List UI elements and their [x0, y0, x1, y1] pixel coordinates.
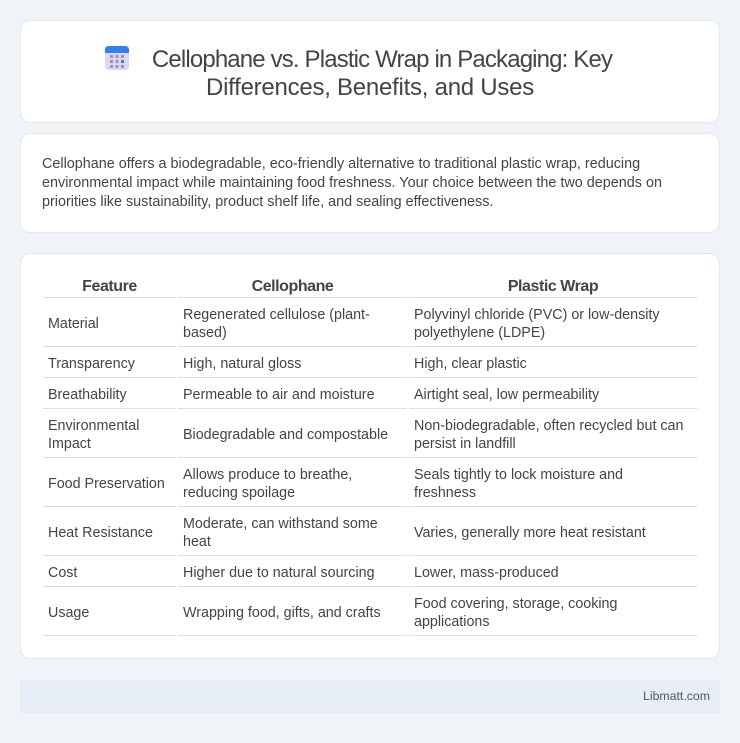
row: Food Preservation: Food Preservation: [48, 476, 165, 492]
intro text: Cellophane offers a biodegradable, eco-friendly alternative to traditional plastic wrap, reducing: [42, 156, 640, 172]
row: Material: Material: [48, 316, 99, 332]
title line 2: Differences, Benefits, and Uses: [206, 74, 534, 101]
footer credit: Libmatt.com: [643, 689, 710, 703]
Material cellophane: [183, 307, 370, 341]
Material cellophane: based): [183, 325, 227, 341]
Food Preservation cellophane: Allows produce to breathe,: [183, 467, 352, 483]
Food Preservation plastic wrap: [414, 467, 623, 501]
Environmental Impact plastic wrap: [414, 418, 683, 452]
Environmental Impact cellophane: Biodegradable and compostable: [183, 427, 388, 443]
table header: Feature: Feature: [82, 278, 137, 295]
Breathability cellophane: Permeable to air and moisture: [183, 387, 375, 403]
row: Breathability: Breathability: [48, 387, 127, 403]
Breathability plastic wrap: Airtight seal, low permeability: [414, 387, 599, 403]
Cost cellophane: Higher due to natural sourcing: [183, 565, 375, 581]
Heat Resistance cellophane: Moderate, can withstand some: [183, 516, 378, 532]
Heat Resistance cellophane: heat: [183, 534, 211, 550]
Transparency plastic wrap: High, clear plastic: [414, 356, 527, 372]
Usage plastic wrap: applications: [414, 614, 490, 630]
Usage cellophane: Wrapping food, gifts, and crafts: [183, 605, 381, 621]
Transparency cellophane: High, natural gloss: [183, 356, 301, 372]
Food Preservation cellophane: reducing spoilage: [183, 485, 295, 501]
footer: [20, 680, 720, 713]
Material plastic wrap: Polyvinyl chloride (PVC) or low-density: [414, 307, 660, 323]
Material plastic wrap: polyethylene (LDPE): [414, 325, 545, 341]
Heat Resistance cellophane: [183, 516, 378, 550]
table header: Cellophane: Cellophane: [252, 278, 333, 295]
panel: intro: [20, 133, 720, 233]
Material cellophane: Regenerated cellulose (plant-: [183, 307, 370, 323]
icon: calendar: [105, 46, 129, 70]
Material plastic wrap: [414, 307, 660, 341]
Usage plastic wrap: [414, 596, 617, 630]
title: Cellophane vs. Plastic Wrap in Packaging: Key: [152, 46, 612, 73]
Environmental Impact plastic wrap: persist in landfill: [414, 436, 516, 452]
row: Environmental Impact: [48, 418, 139, 452]
row: Cost: Cost: [48, 565, 77, 581]
row: Usage: Usage: [48, 605, 89, 621]
Food Preservation plastic wrap: Seals tightly to lock moisture and: [414, 467, 623, 483]
intro text: environmental impact while maintaining food freshness. Your choice between the two depends on: [42, 175, 662, 191]
row: Environmental Impact: Impact: [48, 436, 91, 452]
intro text: [42, 156, 662, 210]
Food Preservation cellophane: [183, 467, 352, 501]
Environmental Impact plastic wrap: Non-biodegradable, often recycled but can: [414, 418, 683, 434]
panel: header: [20, 20, 720, 123]
panel: comparison table: [20, 253, 720, 659]
intro text: priorities like sustainability, product shelf life, and sealing effectiveness.: [42, 194, 493, 210]
row: Environmental Impact: Environmental: [48, 418, 139, 434]
table header: Plastic Wrap: Plastic Wrap: [508, 278, 598, 295]
Heat Resistance plastic wrap: Varies, generally more heat resistant: [414, 525, 646, 541]
row: Transparency: Transparency: [48, 356, 135, 372]
Food Preservation plastic wrap: freshness: [414, 485, 476, 501]
row: Heat Resistance: Heat Resistance: [48, 525, 153, 541]
Cost plastic wrap: Lower, mass-produced: [414, 565, 559, 581]
Usage plastic wrap: Food covering, storage, cooking: [414, 596, 617, 612]
